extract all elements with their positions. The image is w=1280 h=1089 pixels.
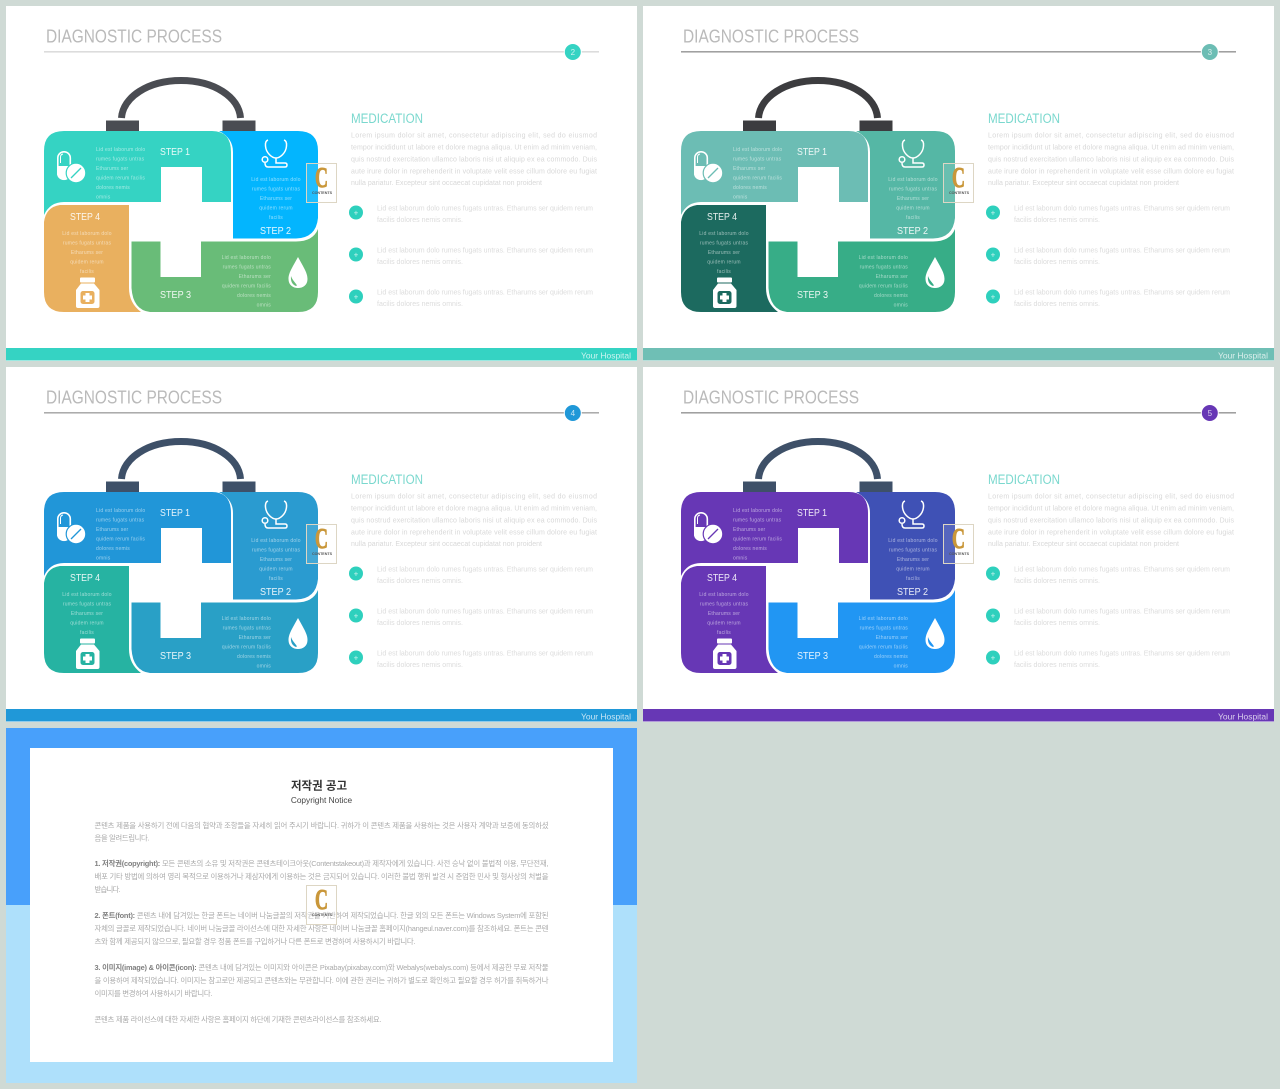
case section: step 1: Etharums ser: [733, 166, 765, 172]
body paragraph: quis nostrud exercitation ullamco laboris nisi ut aliquip ex ea commodo. Duis: [351, 518, 598, 524]
case section: step 3: Etharums ser: [239, 274, 271, 280]
case section: step 2: Lid est laborum dolo: [888, 177, 938, 183]
case section: step 4: Lid est laborum dolo: [699, 231, 749, 237]
bullet list: facilis dolores nemis omnis.: [377, 662, 463, 669]
bullet list: +: [354, 612, 359, 620]
case section: step 4: quidem rerum: [707, 260, 741, 266]
watermark: [306, 885, 336, 924]
case section: step 1: STEP 1: [160, 147, 190, 158]
case section: step 1: Etharums ser: [733, 527, 765, 533]
case section: step 1: [44, 131, 231, 215]
case section: step 2: STEP 2: [897, 226, 928, 237]
case section: step 2: facilis: [906, 576, 920, 582]
title rule: [44, 51, 599, 52]
case section: step 4: facilis: [80, 630, 94, 636]
body paragraph: tempor incididunt ut labore et dolore magna aliqua. Ut enim ad minim veniam,: [351, 144, 597, 152]
case section: step 1: omnis: [96, 194, 111, 200]
case section: step 1: omnis: [733, 194, 748, 200]
bullet list: Lid est laborum dolo rumes fugats untras. Etharums ser quidem rerum: [377, 566, 593, 574]
bullet list: Lid est laborum dolo rumes fugats untras. Etharums ser quidem rerum: [1014, 248, 1230, 254]
case section: step 3: STEP 3: [797, 290, 828, 301]
notice section 3: 3. 이미지(image) & 아이콘(icon): 콘텐츠 내에 담겨있는 이미지와 아이콘은 Pixabay(pixabay.com)와 Webalys(webalys.com) 등에서 제공한 무료 저작물: [94, 963, 549, 972]
watermark: C: [315, 524, 328, 555]
watermark: CONTENTS: [312, 551, 332, 556]
title: DIAGNOSTIC PROCESS: [683, 388, 859, 408]
case section: step 1: rumes fugats untras: [96, 518, 145, 524]
case section: step 3: omnis: [894, 302, 908, 308]
watermark: C: [315, 163, 328, 194]
bullet list: Lid est laborum dolo rumes fugats untras. Etharums ser quidem rerum: [377, 290, 593, 296]
case section: step 4: [44, 205, 141, 312]
case section: step 4: facilis: [80, 269, 94, 275]
case section: step 1: quidem rerum facilis: [96, 536, 145, 542]
case section: step 1: omnis: [96, 556, 111, 562]
medical case handle: [106, 80, 256, 132]
case section: step 2: facilis: [906, 215, 920, 221]
bullet list: +: [354, 570, 359, 578]
case section: step 1: quidem rerum facilis: [733, 176, 782, 182]
notice section 1: 1. 저작권(copyright): 모든 콘텐츠의 소유 및 저작권은 콘텐츠테이크아웃(Contentstakeout)과 제작자에게 있습니다. 사전 승낙 없이 불법적 이용, 무단전재,: [94, 859, 548, 868]
case section: step 4: Etharums ser: [71, 611, 103, 617]
case section: step 2: rumes fugats untras: [252, 548, 300, 554]
notice subheading: Copyright Notice: [291, 795, 353, 805]
case section: step 4: [681, 205, 778, 312]
title: DIAGNOSTIC PROCESS: [683, 26, 859, 46]
body paragraph: Lorem ipsum dolor sit amet, consectetur adipiscing elit, sed do eiusmod: [351, 494, 597, 500]
case section: step 3: [132, 590, 318, 673]
heading: medication: MEDICATION: [988, 472, 1060, 487]
title rule: [681, 51, 1236, 52]
medical case handle: [743, 442, 892, 493]
case section: step 1: Lid est laborum dolo: [96, 147, 145, 153]
case section: step 3: dolores nemis: [237, 293, 271, 299]
bullet list: [986, 206, 1230, 308]
case section: step 2: rumes fugats untras: [889, 186, 937, 192]
case section: step 2: quidem rerum: [259, 206, 293, 212]
watermark: C: [315, 885, 328, 916]
title: DIAGNOSTIC PROCESS: [46, 388, 222, 408]
bullet list: facilis dolores nemis omnis.: [377, 578, 463, 585]
case section: step 4: Etharums ser: [708, 611, 740, 617]
case section: step 4: quidem rerum: [70, 260, 104, 266]
case section: step 4: Lid est laborum dolo: [62, 231, 112, 237]
notice section 3: 을 이용하여 제작되었습니다. 이미지는 참고로만 제공되고 콘텐츠와는 무관합니다. 이에 관한 권리는 귀하가 별도로 확인하고 필요할 경우 허가를 취득하거나: [94, 976, 549, 985]
case section: step 2: rumes fugats untras: [252, 186, 300, 192]
case section: step 4: rumes fugats untras: [63, 602, 111, 608]
heading: medication: MEDICATION: [988, 111, 1060, 126]
page badge: [564, 404, 581, 422]
notice section 2: 자체의 글꼴로 제작되었습니다. 네이버 나눔글꼴 라이선스에 대한 자세한 사항은 네이버 나눔글꼴 홈페이지(hangeul.naver.com)를 참조하세요. 폰트는 콘텐: [94, 924, 549, 933]
body paragraph: nulla pariatur. Excepteur sint occaecat cupidatat non proident: [988, 180, 1179, 187]
case section: step 3: Etharums ser: [876, 635, 908, 641]
panel: slide 3, green medical case: [643, 6, 1274, 361]
case section: step 3: rumes fugats untras: [860, 264, 908, 270]
notice card: [30, 748, 613, 1062]
page badge: 4: [571, 409, 576, 418]
body paragraph: [351, 132, 598, 187]
page badge: [1201, 44, 1218, 60]
notice section 3: 이미지를 변경하여 사용하시기 바랍니다.: [94, 989, 212, 998]
body paragraph: Lorem ipsum dolor sit amet, consectetur adipiscing elit, sed do eiusmod: [988, 494, 1234, 500]
case section: step 3: rumes fugats untras: [223, 626, 271, 632]
bullet list: +: [354, 292, 359, 302]
footer label: Your Hospital: [1218, 350, 1268, 360]
body paragraph: tempor incididunt ut labore et dolore magna aliqua. Ut enim ad minim veniam,: [988, 506, 1234, 512]
body paragraph: [988, 132, 1234, 187]
notice intro: 음을 알려드립니다.: [94, 834, 150, 842]
case section: step 4: facilis: [717, 630, 731, 636]
case section: step 2: [219, 131, 318, 238]
bullet list: Lid est laborum dolo rumes fugats untras. Etharums ser quidem rerum: [1014, 290, 1230, 296]
notice heading: 저작권 공고: [291, 778, 347, 792]
case section: step 4: STEP 4: [707, 212, 737, 223]
case section: step 1: rumes fugats untras: [96, 156, 145, 162]
case section: step 1: dolores nemis: [96, 546, 130, 552]
watermark: C: [952, 163, 965, 194]
bullet list: facilis dolores nemis omnis.: [1014, 259, 1100, 266]
case section: step 3: Etharums ser: [239, 635, 271, 641]
body paragraph: nulla pariatur. Excepteur sint occaecat cupidatat non proident: [988, 541, 1179, 548]
footer bar: [643, 709, 1274, 722]
body paragraph: quis nostrud exercitation ullamco laboris nisi ut aliquip ex ea commodo. Duis: [988, 156, 1234, 164]
bullet list: [986, 566, 1230, 669]
bullet list: facilis dolores nemis omnis.: [377, 620, 463, 627]
bullet list: facilis dolores nemis omnis.: [1014, 578, 1100, 585]
case section: step 2: Etharums ser: [897, 557, 929, 563]
case section: step 1: dolores nemis: [733, 185, 767, 191]
bullet list: +: [991, 250, 996, 260]
watermark: C: [952, 524, 965, 555]
case section: step 4: STEP 4: [70, 573, 100, 584]
notice section 1: 받습니다.: [94, 885, 120, 894]
bullet list: Lid est laborum dolo rumes fugats untras. Etharums ser quidem rerum: [377, 608, 593, 616]
bullet list: Lid est laborum dolo rumes fugats untras. Etharums ser quidem rerum: [377, 206, 593, 212]
watermark: [306, 163, 336, 202]
case section: step 2: STEP 2: [260, 226, 291, 237]
case section: step 2: Etharums ser: [260, 196, 292, 202]
case section: step 1: dolores nemis: [96, 185, 130, 191]
case section: step 1: [681, 131, 868, 215]
bullet list: facilis dolores nemis omnis.: [1014, 301, 1100, 308]
case section: step 1: STEP 1: [160, 508, 190, 519]
case section: step 3: Lid est laborum dolo: [859, 616, 908, 622]
bullet list: Lid est laborum dolo rumes fugats untras. Etharums ser quidem rerum: [1014, 608, 1230, 616]
case section: step 1: quidem rerum facilis: [733, 536, 782, 542]
footer bar: [6, 709, 637, 722]
bullet list: Lid est laborum dolo rumes fugats untras. Etharums ser quidem rerum: [377, 650, 593, 658]
title rule: [44, 412, 599, 413]
notice section 3: [94, 963, 549, 998]
case section: step 4: rumes fugats untras: [700, 602, 748, 608]
body paragraph: aute irure dolor in reprehenderit in voluptate velit esse cillum dolore eu fugiat: [351, 168, 597, 176]
case section: step 3: dolores nemis: [237, 654, 271, 660]
case section: step 4: Lid est laborum dolo: [699, 592, 749, 598]
case section: step 2: Lid est laborum dolo: [251, 538, 301, 544]
case section: step 2: quidem rerum: [896, 206, 930, 212]
case section: step 4: Lid est laborum dolo: [62, 592, 112, 598]
title: DIAGNOSTIC PROCESS: [46, 26, 222, 46]
body paragraph: [351, 494, 598, 548]
page badge: 5: [1208, 409, 1213, 418]
case section: step 4: rumes fugats untras: [63, 240, 111, 246]
case section: step 2: Lid est laborum dolo: [251, 177, 301, 183]
case section: step 2: facilis: [269, 576, 283, 582]
panel: slide 4, blue medical case: [6, 367, 637, 722]
bullet list: facilis dolores nemis omnis.: [1014, 620, 1100, 627]
case section: step 3: quidem rerum facilis: [222, 284, 271, 290]
case section: step 1: [44, 492, 231, 576]
case section: step 1: [681, 492, 868, 576]
watermark: [944, 163, 974, 202]
case section: step 3: [768, 229, 955, 312]
body paragraph: nulla pariatur. Excepteur sint occaecat cupidatat non proident: [351, 541, 542, 548]
notice section 2: 2. 폰트(font): 콘텐츠 내에 담겨있는 한글 폰트는 네이버 나눔글꼴의 저작권을 기반하여 제작되었습니다. 한글 외의 모든 폰트는 Windows System에 포함된: [94, 911, 549, 920]
footer label: Your Hospital: [581, 350, 631, 360]
case section: step 3: rumes fugats untras: [860, 626, 908, 632]
notice closing line: 콘텐츠 제품 라이선스에 대한 자세한 사항은 홈페이지 하단에 기재한 콘텐츠라이선스를 참조하세요.: [94, 1015, 382, 1024]
case section: step 4: rumes fugats untras: [700, 240, 748, 246]
case section: step 3: quidem rerum facilis: [859, 284, 908, 290]
case section: step 2: [856, 492, 955, 600]
page badge: 3: [1208, 48, 1213, 57]
case section: step 3: [132, 229, 318, 312]
case section: step 2: STEP 2: [260, 587, 291, 598]
notice intro: 콘텐츠 제품을 사용하기 전에 다음의 협약과 조항들을 자세히 읽어 주시기 바랍니다. 귀하가 이 콘텐츠 제품을 사용하는 것은 사용자 계약과 보증에 동의하셨: [94, 821, 549, 830]
heading: medication: MEDICATION: [351, 111, 423, 126]
page badge: [564, 44, 581, 60]
bullet list: +: [991, 654, 996, 662]
case section: step 1: quidem rerum facilis: [96, 176, 145, 182]
panel: slide 5, purple medical case: [643, 367, 1274, 722]
case section: step 2: [856, 131, 955, 238]
body paragraph: aute irure dolor in reprehenderit in voluptate velit esse cillum dolore eu fugiat: [351, 530, 597, 536]
footer label: Your Hospital: [1218, 712, 1268, 722]
bullet list: [349, 206, 593, 308]
case section: step 4: facilis: [717, 269, 731, 275]
case section: step 1: dolores nemis: [733, 546, 767, 552]
case section: step 3: omnis: [894, 664, 908, 670]
bullet list: Lid est laborum dolo rumes fugats untras. Etharums ser quidem rerum: [1014, 206, 1230, 212]
bullet list: +: [991, 292, 996, 302]
case section: step 4: [681, 566, 778, 673]
case section: step 3: quidem rerum facilis: [222, 644, 271, 650]
case section: step 1: Lid est laborum dolo: [96, 508, 145, 514]
body paragraph: aute irure dolor in reprehenderit in voluptate velit esse cillum dolore eu fugiat: [988, 168, 1234, 176]
body paragraph: quis nostrud exercitation ullamco laboris nisi ut aliquip ex ea commodo. Duis: [988, 518, 1234, 524]
case section: step 4: Etharums ser: [708, 250, 740, 256]
page badge: 2: [571, 48, 576, 57]
footer bar: [6, 348, 637, 360]
heading: medication: MEDICATION: [351, 472, 423, 487]
bullet list: facilis dolores nemis omnis.: [377, 301, 463, 308]
footer bar: [643, 348, 1274, 360]
case section: step 1: Lid est laborum dolo: [733, 147, 782, 153]
bullet list: facilis dolores nemis omnis.: [377, 259, 463, 266]
case section: step 1: Lid est laborum dolo: [733, 508, 782, 514]
body paragraph: nulla pariatur. Excepteur sint occaecat cupidatat non proident: [351, 180, 542, 187]
case section: step 3: omnis: [257, 664, 271, 670]
case section: step 1: Etharums ser: [96, 527, 128, 533]
bullet list: facilis dolores nemis omnis.: [377, 217, 463, 224]
case section: step 2: [219, 492, 318, 600]
body paragraph: quis nostrud exercitation ullamco laboris nisi ut aliquip ex ea commodo. Duis: [351, 156, 598, 164]
case section: step 3: STEP 3: [160, 290, 191, 301]
panel: slide 2, teal and orange medical case: [6, 6, 637, 361]
case section: step 3: STEP 3: [797, 651, 828, 662]
case section: step 3: dolores nemis: [874, 654, 908, 660]
body paragraph: tempor incididunt ut labore et dolore magna aliqua. Ut enim ad minim veniam,: [351, 506, 597, 512]
bullet list: facilis dolores nemis omnis.: [1014, 662, 1100, 669]
body paragraph: [988, 494, 1234, 548]
case section: step 4: STEP 4: [707, 573, 737, 584]
case section: step 2: quidem rerum: [259, 566, 293, 572]
case section: step 3: rumes fugats untras: [223, 264, 271, 270]
medical case handle: [743, 80, 892, 132]
case section: step 3: STEP 3: [160, 651, 191, 662]
watermark: CONTENTS: [312, 190, 332, 195]
notice section 2: [94, 911, 549, 946]
case section: step 4: Etharums ser: [71, 250, 103, 256]
case section: step 4: quidem rerum: [70, 620, 104, 626]
case section: step 3: quidem rerum facilis: [859, 644, 908, 650]
case section: step 3: [768, 590, 955, 673]
bullet list: +: [991, 570, 996, 578]
bullet list: [349, 566, 593, 669]
title rule: [681, 412, 1236, 413]
body paragraph: Lorem ipsum dolor sit amet, consectetur adipiscing elit, sed do eiusmod: [351, 132, 597, 140]
bullet list: +: [354, 250, 359, 260]
case section: step 2: facilis: [269, 215, 283, 221]
body paragraph: aute irure dolor in reprehenderit in voluptate velit esse cillum dolore eu fugiat: [988, 530, 1234, 536]
bullet list: Lid est laborum dolo rumes fugats untras. Etharums ser quidem rerum: [1014, 566, 1230, 574]
bullet list: +: [354, 654, 359, 662]
body paragraph: tempor incididunt ut labore et dolore magna aliqua. Ut enim ad minim veniam,: [988, 144, 1234, 152]
case section: step 3: Lid est laborum dolo: [222, 616, 271, 622]
case section: step 3: Etharums ser: [876, 274, 908, 280]
bullet list: +: [354, 208, 359, 218]
case section: step 1: STEP 1: [797, 147, 827, 158]
case section: step 3: dolores nemis: [874, 293, 908, 299]
panel: copyright notice: [6, 728, 637, 1083]
notice intro: [94, 821, 549, 842]
case section: step 4: [44, 566, 141, 673]
case section: step 3: omnis: [257, 302, 271, 308]
case section: step 2: Etharums ser: [897, 196, 929, 202]
bullet list: facilis dolores nemis omnis.: [1014, 217, 1100, 224]
case section: step 1: rumes fugats untras: [733, 518, 782, 524]
watermark: [306, 524, 336, 564]
bullet list: +: [991, 612, 996, 620]
page badge: [1201, 404, 1218, 422]
case section: step 3: Lid est laborum dolo: [859, 255, 908, 261]
notice section 1: [94, 859, 549, 894]
watermark: [944, 524, 974, 564]
case section: step 2: Lid est laborum dolo: [888, 538, 938, 544]
notice section 1: 배포 기타 방법에 의하여 영리 목적으로 이용하거나 제삼자에게 이용하는 것은 금지되어 있습니다. 이러한 불법 행위 발견 시 준엄한 민사 및 형사상의 처벌을: [94, 872, 549, 881]
case section: step 1: rumes fugats untras: [733, 156, 782, 162]
case section: step 2: rumes fugats untras: [889, 548, 937, 554]
bullet list: Lid est laborum dolo rumes fugats untras. Etharums ser quidem rerum: [377, 248, 593, 254]
medical case handle: [106, 442, 256, 493]
watermark: CONTENTS: [949, 190, 969, 195]
bullet list: Lid est laborum dolo rumes fugats untras. Etharums ser quidem rerum: [1014, 650, 1230, 658]
bullet list: +: [991, 208, 996, 218]
case section: step 2: STEP 2: [897, 587, 928, 598]
case section: step 1: Etharums ser: [96, 166, 128, 172]
case section: step 4: STEP 4: [70, 212, 100, 223]
footer label: Your Hospital: [581, 712, 631, 722]
watermark: CONTENTS: [949, 551, 969, 556]
case section: step 3: Lid est laborum dolo: [222, 255, 271, 261]
case section: step 2: quidem rerum: [896, 566, 930, 572]
case section: step 4: quidem rerum: [707, 620, 741, 626]
case section: step 1: STEP 1: [797, 508, 827, 519]
notice section 2: 츠와 함께 제공되지 않으므로, 필요할 경우 정품 폰트를 구입하거나 다른 폰트로 변경하여 사용하시기 바랍니다.: [94, 937, 416, 946]
case section: step 2: Etharums ser: [260, 557, 292, 563]
watermark: CONTENTS: [312, 912, 332, 917]
case section: step 1: omnis: [733, 556, 748, 562]
body paragraph: Lorem ipsum dolor sit amet, consectetur adipiscing elit, sed do eiusmod: [988, 132, 1234, 140]
